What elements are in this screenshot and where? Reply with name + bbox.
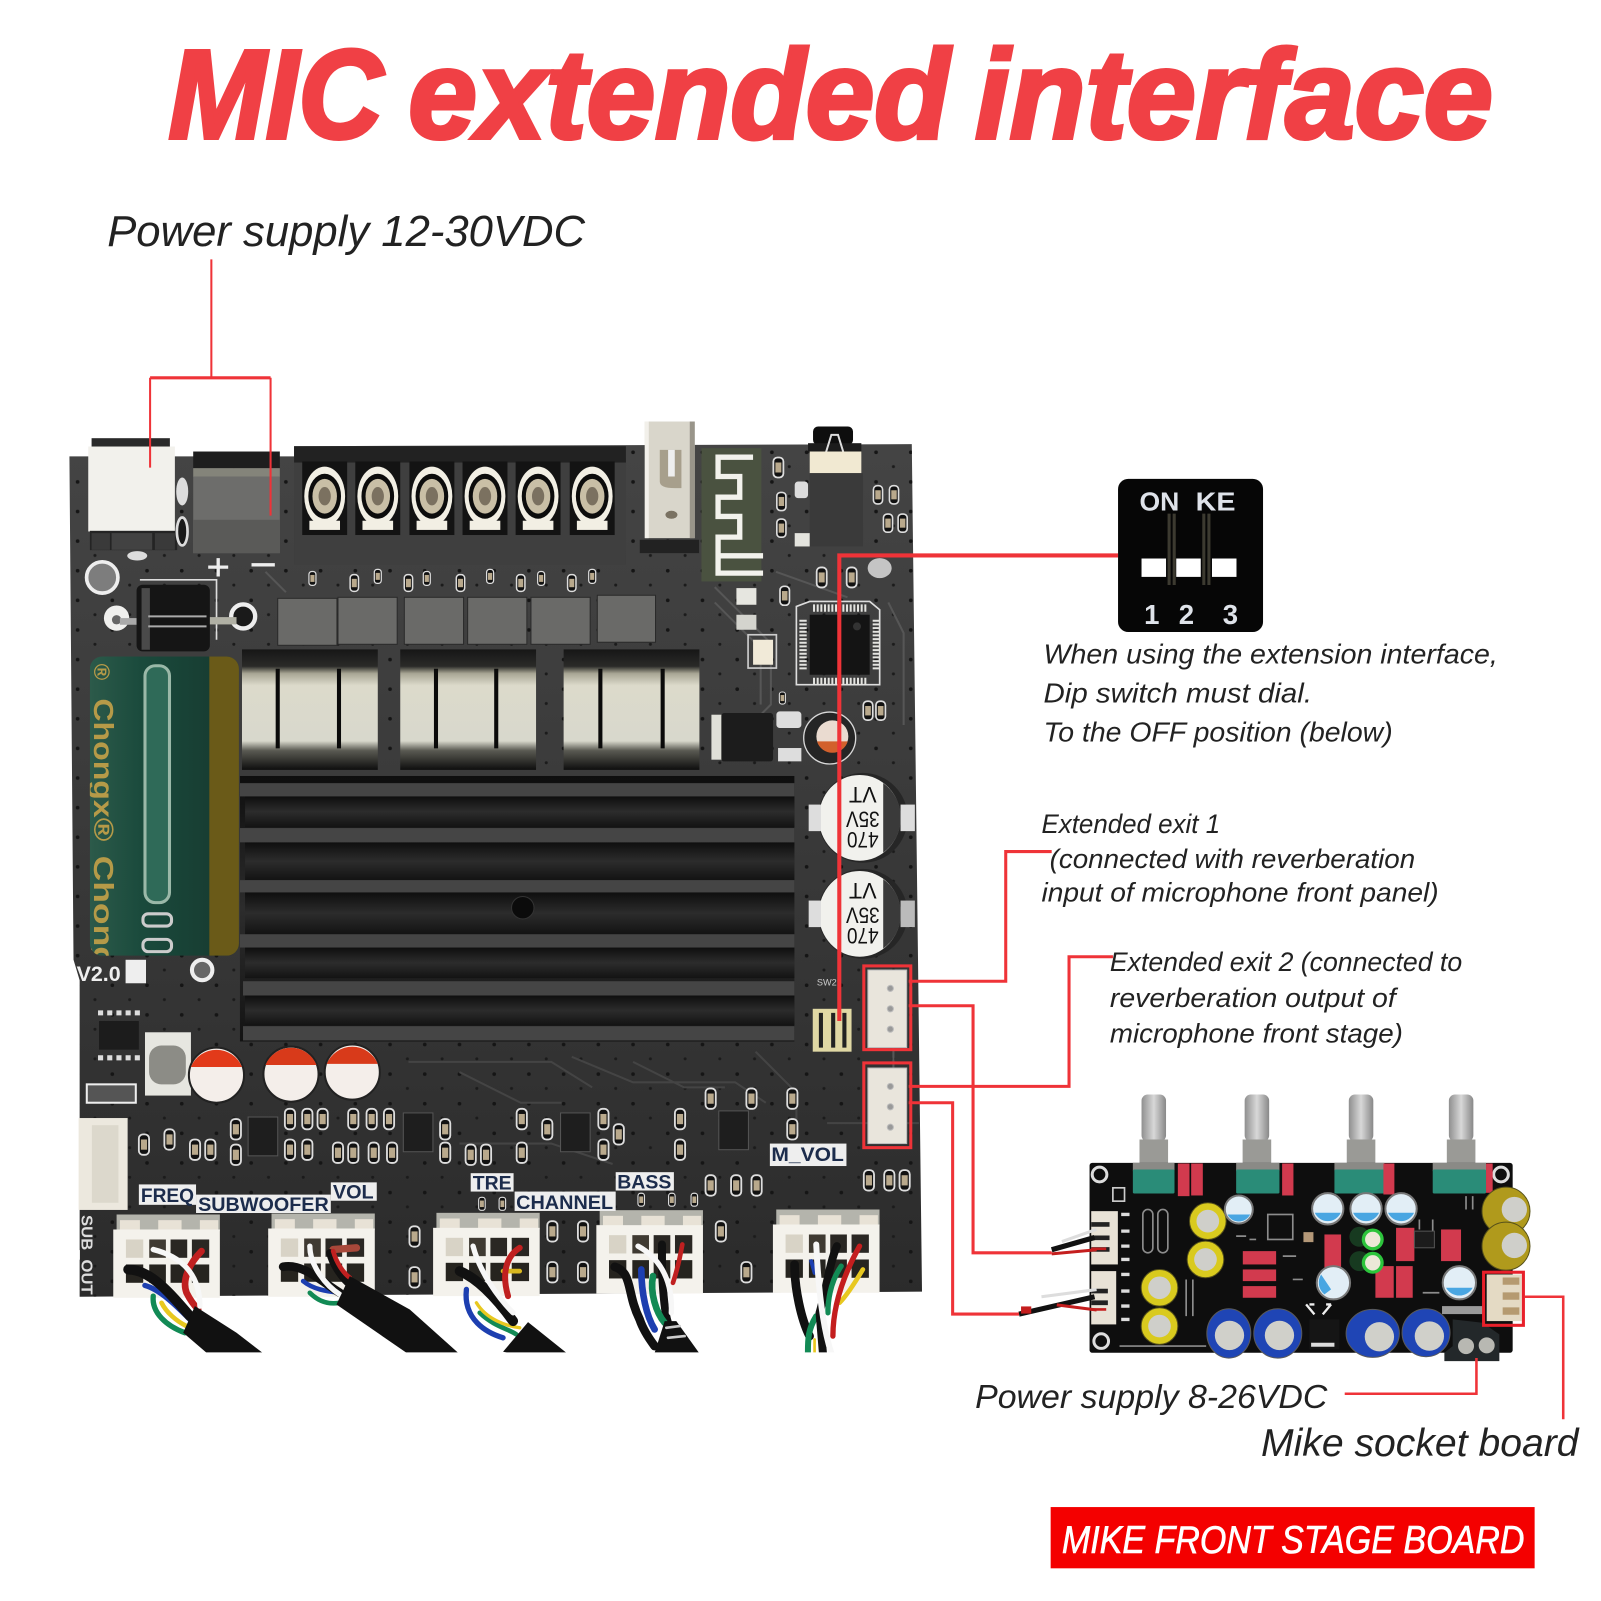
output coils: [242, 649, 699, 770]
connector: FREQ: [113, 1214, 220, 1298]
DIP switch close-up: 3: [1223, 599, 1238, 630]
green capacitors: [1349, 1227, 1382, 1272]
board details: version mark and holes: [77, 960, 212, 986]
small DIP switch on board: SW2: [817, 977, 837, 987]
connector: M_VOL: [773, 1209, 880, 1293]
text: dip switch instructions: Dip switch must dial.: [1044, 677, 1312, 708]
title: interface: [975, 23, 1493, 165]
text: dip switch instructions: When using the extension interface,: [1044, 639, 1498, 670]
cable 4: [615, 1244, 699, 1353]
silkscreen labels: [139, 1144, 846, 1216]
banner: mike front stage board: MIKE FRONT STAGE BOARD: [1062, 1519, 1524, 1562]
silkscreen labels: CHANNEL: [516, 1192, 613, 1214]
callout line: dip switch: [839, 555, 1118, 1021]
470uF capacitors: 35V: [846, 807, 880, 832]
text: extended exit 2: reverberation output of: [1110, 983, 1399, 1013]
large green capacitor: Chong: [88, 856, 119, 968]
potentiometers: [1133, 1163, 1486, 1193]
power terminal: [1444, 1319, 1499, 1361]
silkscreen labels: VOL: [333, 1182, 374, 1204]
mike front stage board: [1019, 1095, 1530, 1361]
callout: mike socket: [1484, 1272, 1563, 1419]
wire line: exit 1 to front board: [909, 1006, 1052, 1253]
big blue capacitors: [1207, 1309, 1450, 1358]
label: power supply 12-30VDC: Power supply 12-30VDC: [107, 207, 585, 256]
connector: TRE: [433, 1213, 540, 1296]
connector: VOL: [268, 1213, 375, 1297]
text: dip switch instructions: To the OFF position (below): [1044, 716, 1393, 747]
wire line: exit 2 to front board: [909, 1103, 1019, 1314]
text: dip switch instructions: [1044, 639, 1498, 747]
callout line: power supply: [150, 259, 271, 516]
DIP switch close-up: 1: [1144, 599, 1159, 630]
470uF capacitors: VT: [849, 878, 877, 903]
knobs: [1139, 1095, 1475, 1166]
light blue capacitors: [1225, 1193, 1476, 1299]
silkscreen labels: BASS: [617, 1171, 671, 1193]
text: extended exit 1: [1041, 809, 1439, 908]
DIP switch close-up: ON: [1139, 489, 1179, 517]
top-left parts: power jack, connector, diode: [87, 438, 280, 651]
title: [168, 23, 1493, 165]
large green capacitor: [88, 657, 240, 968]
cable 5: [795, 1244, 863, 1353]
gray inductors: [278, 595, 656, 645]
label: mike socket board: Mike socket board: [1261, 1422, 1580, 1465]
silkscreen labels: SUBWOOFER: [198, 1194, 329, 1216]
connector: BASS: [596, 1210, 703, 1293]
top-right parts: silver connector, antenna, jack, chip: [640, 422, 907, 764]
text: extended exit 1: input of microphone front panel): [1041, 878, 1439, 908]
text: extended exit 1: Extended exit 1: [1041, 809, 1220, 839]
red film capacitors: [1178, 1163, 1493, 1298]
title: extended: [408, 23, 952, 165]
470uF capacitors: [809, 773, 915, 959]
470uF capacitors: 470: [847, 923, 879, 948]
470uF capacitors: 35V: [846, 903, 880, 928]
callout line: exit 1: [909, 852, 1052, 981]
title: MIC: [168, 23, 384, 165]
board details: version mark and holes: V2.0: [77, 962, 121, 986]
lower left parts: SUB_OUT: [78, 1215, 95, 1295]
small SMD row under terminal: [309, 569, 596, 591]
text: extended exit 2: microphone front stage): [1110, 1018, 1403, 1048]
chips: [1303, 1231, 1483, 1349]
silkscreen labels: FREQ: [141, 1185, 194, 1207]
silk details: [1092, 1167, 1508, 1348]
large green capacitor: Chongx®: [88, 698, 119, 841]
470uF capacitors: VT: [849, 782, 877, 807]
yellow capacitors: [1141, 1187, 1530, 1344]
text: extended exit 2: Extended exit 2 (connected to: [1110, 947, 1462, 977]
op-amp chips: [248, 1111, 748, 1156]
extension connectors J: [868, 970, 907, 1144]
mike socket connector: [1487, 1274, 1522, 1321]
electrolytic capacitors: [189, 1045, 380, 1103]
main amplifier board: [69, 422, 922, 1353]
board components: [1090, 1163, 1530, 1361]
DIP switch close-up: [1118, 479, 1263, 632]
speaker terminal block: [294, 446, 626, 565]
cable 1: [128, 1249, 263, 1353]
highlight boxes: extension connectors: [864, 966, 911, 1148]
silkscreen labels: M_VOL: [771, 1144, 844, 1166]
pcb: [69, 444, 922, 1297]
large green capacitor: ®: [89, 664, 114, 681]
text: extended exit 1: (connected with reverberation: [1050, 844, 1415, 874]
DIP switch close-up: 2: [1179, 599, 1194, 630]
cable 3: [460, 1246, 566, 1353]
white output connectors and cables: [113, 1209, 880, 1353]
board pcb: [1090, 1163, 1513, 1353]
cable 2: [283, 1246, 458, 1353]
callout line: power supply 8-26VDC: [1345, 1358, 1476, 1394]
silkscreen labels: TRE: [473, 1173, 512, 1195]
heatsink: [240, 776, 794, 1041]
banner: mike front stage board: [1051, 1507, 1535, 1568]
small DIP switch on board: [813, 977, 852, 1052]
text: extended exit 2: [1110, 947, 1462, 1048]
left connectors: [1091, 1211, 1130, 1324]
callout line: exit 2: [909, 957, 1113, 1086]
wires to extended exits: [1019, 1229, 1097, 1314]
label: power supply 8-26VDC: Power supply 8-26VDC: [975, 1379, 1328, 1416]
lower left parts: [78, 1013, 191, 1295]
470uF capacitors: 470: [847, 827, 879, 852]
DIP switch close-up: KE: [1196, 489, 1235, 517]
SMD components: [139, 1088, 910, 1288]
